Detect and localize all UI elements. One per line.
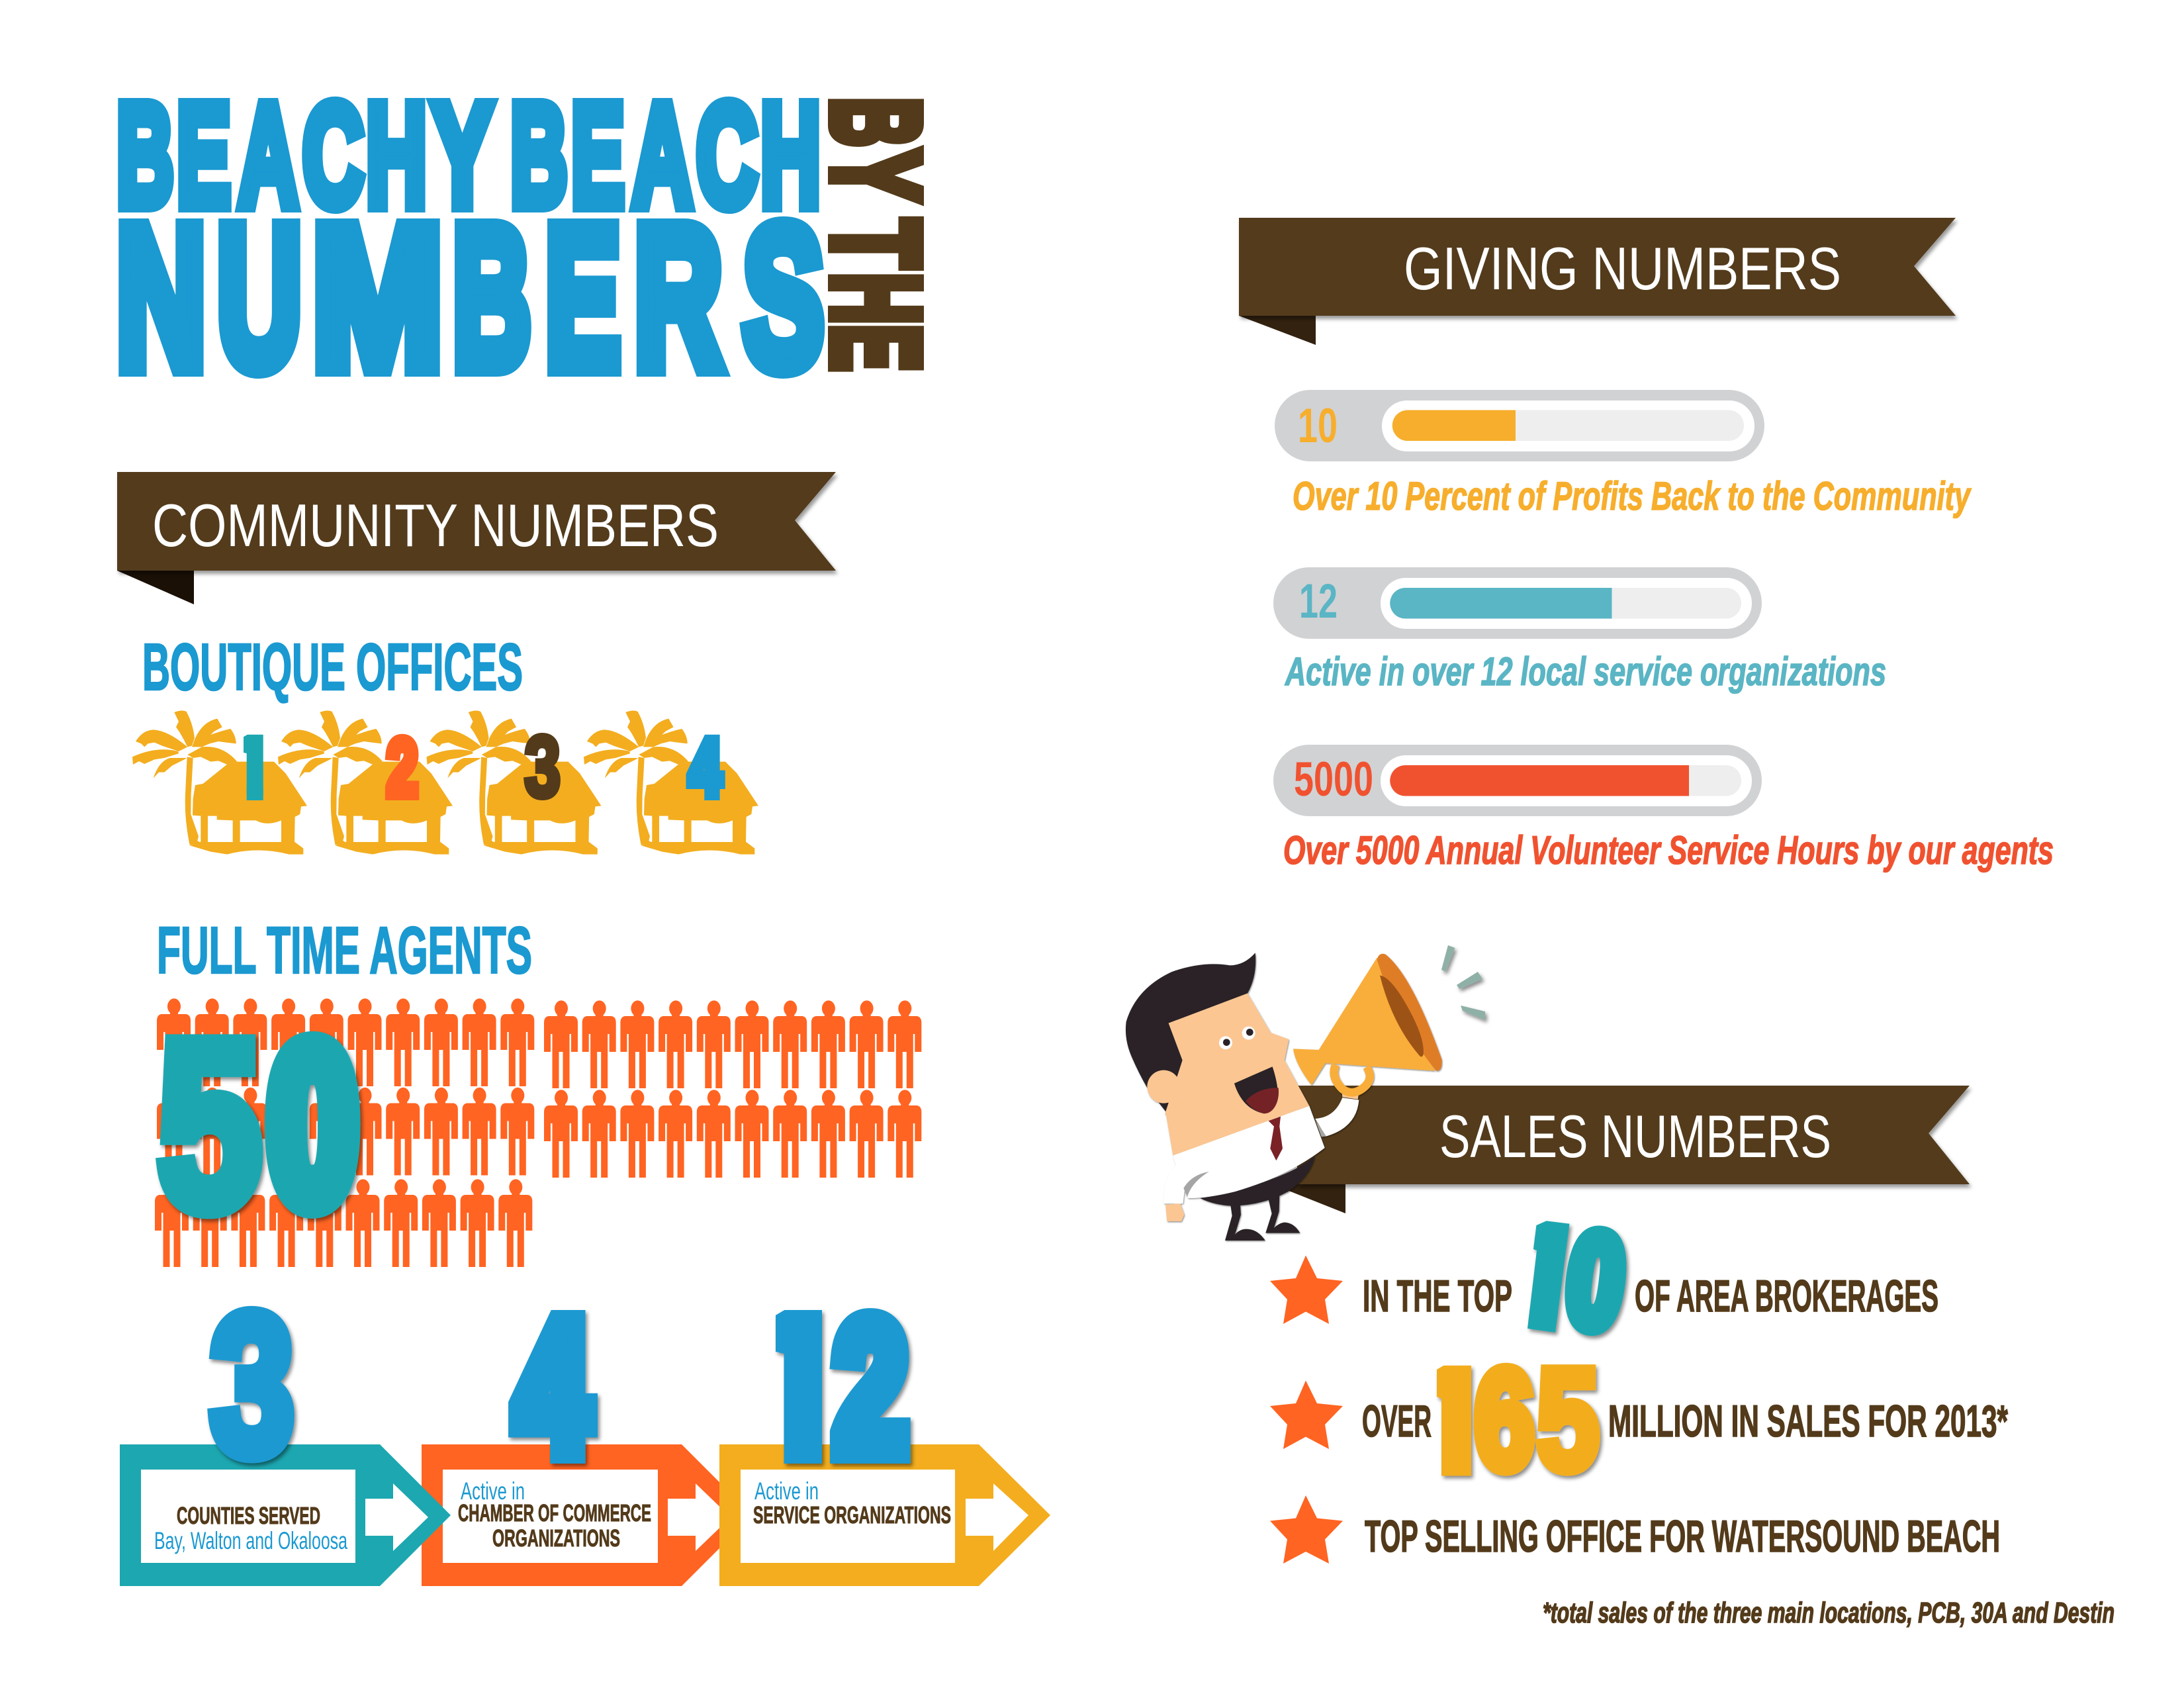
progress bar: 10 percent: [1275, 390, 1764, 461]
heading: full time agents: FULL TIME AGENTS: [157, 914, 532, 988]
office numbers: 3: [524, 718, 561, 815]
office 4 hut: [584, 711, 758, 855]
title line: NUMBERS: U: [217, 185, 302, 410]
icon: star: [1270, 1495, 1343, 1564]
title: Beachy Beach by the Numbers: [116, 73, 944, 410]
title line: BEACHY BEACH: A: [238, 73, 298, 236]
title line: BEACHY BEACH: A: [632, 73, 692, 236]
office numbers: [244, 733, 725, 800]
progress bar: 10 percent: 10: [1298, 399, 1338, 453]
office 3 hut: [426, 711, 601, 855]
title line: NUMBERS: B: [453, 185, 531, 410]
title line: BEACHY BEACH: E: [177, 73, 230, 236]
progress bar: 12 organizations: 12: [1299, 575, 1338, 628]
title line: NUMBERS: N: [116, 185, 206, 410]
office 2 hut: [278, 711, 453, 855]
banner: giving numbers: GIVING NUMBERS: [1404, 236, 1841, 303]
arrow panel: chamber of commerce: Active in: [461, 1477, 525, 1505]
banner: community numbers: COMMUNITY NUMBERS: [152, 492, 719, 559]
arrow panel: service organizations: [719, 1444, 1050, 1586]
banner: giving numbers: [1239, 218, 1956, 345]
office 1 hut: [132, 711, 307, 855]
big number: 50: [158, 992, 356, 1258]
arrow panel: chamber of commerce: [422, 1444, 752, 1586]
title line: BEACHY BEACH: Y: [432, 73, 492, 236]
big numbers: 3, 4, 12: 2: [834, 1282, 907, 1491]
title line: BEACHY BEACH: B: [510, 73, 567, 236]
caption: active in over 12: Active in over 12 local service organizations: [1285, 649, 1886, 694]
big numbers: 3, 4, 12: 3: [210, 1273, 294, 1495]
icon: star: [1270, 1255, 1343, 1324]
title line: BEACHY BEACH: E: [571, 73, 624, 236]
title line: BEACHY BEACH: B: [116, 73, 173, 236]
big numbers: 3, 4, 12: 1: [739, 1282, 853, 1491]
big number: 50: 5: [158, 992, 261, 1258]
title vertical: BY THE: [807, 98, 944, 371]
title line: BEACHY BEACH: H: [366, 73, 427, 236]
banner: sales numbers: SALES NUMBERS: [1439, 1103, 1831, 1170]
sales line: top 10: IN THE TOP: [1363, 1271, 1512, 1321]
sales line: top 10: [1270, 1197, 1938, 1358]
arrow panel: service organizations: Active in: [754, 1477, 819, 1505]
illustration: businessman with megaphone: [1126, 953, 1442, 1241]
progress bar: 12 organizations: [1273, 567, 1762, 639]
title line: BEACHY BEACH: C: [302, 73, 363, 236]
banner: community numbers: [117, 472, 836, 604]
big number: 50: 0: [269, 1001, 356, 1249]
title line: NUMBERS: S: [743, 185, 823, 410]
title vertical: BY THE: Y: [807, 150, 944, 201]
title vertical: BY THE: T: [807, 219, 944, 268]
sales line: over 165 million: OVER: [1362, 1396, 1432, 1446]
big number: 165: 5: [1537, 1339, 1599, 1499]
title line: NUMBERS: E: [545, 185, 620, 410]
sales line: over 165 million: [1270, 1339, 2008, 1499]
icon: star: [1270, 1381, 1343, 1449]
arrow panel: counties served: [120, 1444, 451, 1586]
arrow panel: service organizations: SERVICE ORGANIZATIONS: [753, 1501, 951, 1528]
big numbers: 3, 4, 12: 4: [516, 1282, 590, 1491]
arrow panel: chamber of commerce: CHAMBER OF COMMERCE: [458, 1499, 651, 1526]
big number: 10: 0: [1560, 1205, 1631, 1356]
title line: BEACHY BEACH: [116, 73, 821, 236]
title vertical: BY THE: H: [807, 273, 944, 324]
title line: NUMBERS: R: [635, 185, 722, 410]
title line: NUMBERS: [116, 185, 823, 410]
icons: four palm huts with office numbers: [132, 711, 758, 855]
progress bar: 5000 hours: 5000: [1294, 753, 1373, 806]
progress bar: 5000 hours: [1273, 745, 1762, 816]
arrow panel: counties served: COUNTIES SERVED: [177, 1502, 320, 1529]
office numbers: 1: [228, 722, 277, 812]
banner: sales numbers: [1287, 1086, 1970, 1213]
title vertical: BY THE: E: [807, 324, 944, 371]
title line: BEACHY BEACH: C: [696, 73, 757, 236]
title line: NUMBERS: M: [312, 185, 443, 410]
big number: 10: [1527, 1221, 1631, 1341]
office numbers: 4: [689, 722, 721, 812]
big number: 10: 1: [1498, 1197, 1598, 1358]
sales line: top selling office: [1270, 1495, 2000, 1564]
heading: boutique offices: BOUTIQUE OFFICES: [142, 630, 523, 704]
arrow panel: chamber of commerce: ORGANIZATIONS: [492, 1524, 620, 1552]
big numbers: 3, 4, 12: [206, 1305, 915, 1469]
big number: 165: 6: [1475, 1341, 1534, 1499]
icon: megaphone sound marks: [1441, 945, 1485, 1020]
title line: BEACHY BEACH: H: [760, 73, 821, 236]
big number: 165: [1436, 1362, 1605, 1481]
big number: 165: 1: [1411, 1346, 1493, 1496]
pictogram: fifty agents: [155, 998, 921, 1267]
arrow panel: counties served: Bay, Walton and Okaloosa: [154, 1527, 347, 1554]
office numbers: 2: [387, 722, 418, 812]
title vertical: BY THE: B: [807, 98, 944, 147]
sales line: top 10: OF AREA BROKERAGES: [1635, 1271, 1938, 1321]
